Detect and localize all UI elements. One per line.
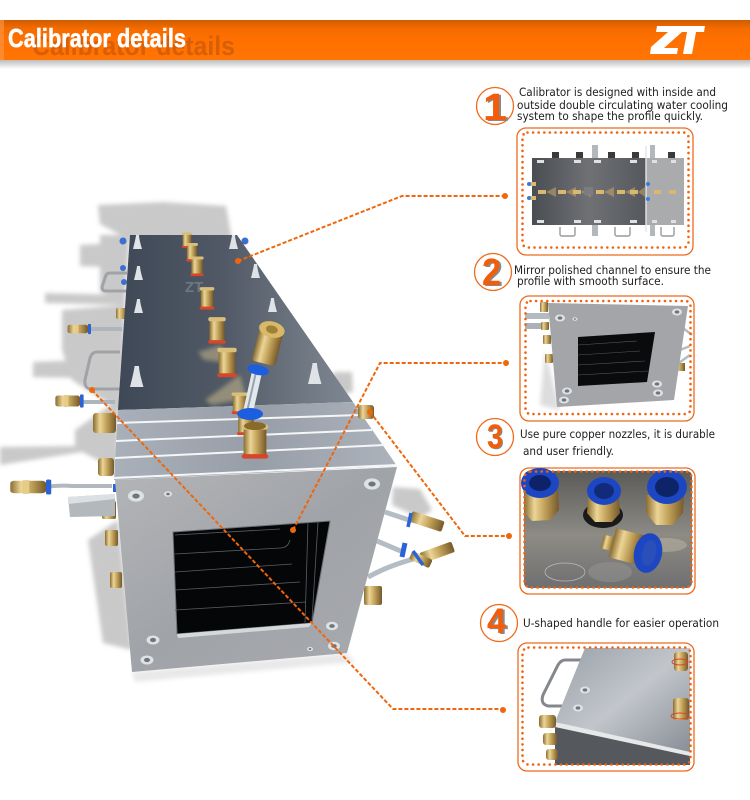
badge 4: 4 (487, 602, 507, 641)
ribbed face (114, 402, 397, 480)
U handles and left hoses (85, 273, 127, 389)
caption 1: Calibrator is designed with inside and (519, 85, 716, 99)
panel 3: copper nozzle thumbnail (520, 468, 695, 594)
badge 3: 3 (487, 418, 503, 456)
floor shadow of calibrator (0, 202, 432, 650)
side bracket (68, 494, 115, 517)
badge 1: 1 (483, 87, 507, 129)
title: Calibrator details (8, 23, 186, 53)
nozzle bodies (524, 490, 684, 565)
badge 2: 2 (484, 253, 503, 295)
caption 3: Use pure copper nozzles, it is durable (520, 427, 715, 441)
badge 3 (476, 418, 514, 457)
sight tube fitting (232, 319, 286, 459)
calibrator main photo: ZT (185, 279, 203, 296)
leader line 2 (290, 360, 509, 533)
badge 2 (474, 252, 512, 295)
calibrator main photo (10, 232, 455, 672)
header band (0, 20, 750, 69)
top face (118, 235, 353, 410)
panel 1: top view thumbnail (517, 128, 693, 255)
right hoses (368, 512, 417, 577)
badge 3: 3 (488, 419, 504, 457)
caption 2: Mirror polished channel to ensure the (514, 263, 711, 277)
top brass fittings (182, 232, 237, 377)
top face screws (130, 235, 322, 387)
logo ZT (650, 26, 705, 54)
leader line 4 (89, 387, 506, 713)
badge 1: 1 (485, 88, 509, 130)
soft shadow under front plate (132, 653, 355, 682)
caption 1: system to shape the profile quickly. (517, 109, 703, 123)
title shadow: Calibrator details (32, 31, 235, 61)
nozzle blue caps (521, 468, 687, 575)
caption 3: and user friendly. (523, 444, 614, 458)
caption 2: profile with smooth surface. (517, 274, 664, 288)
badge 4: 4 (489, 603, 509, 642)
badge 2: 2 (482, 252, 501, 294)
channel window (173, 521, 330, 638)
badge 1 (476, 87, 514, 130)
caption 4: U-shaped handle for easier operation (523, 616, 719, 630)
caption 1 (517, 85, 728, 123)
leader line 1 (235, 193, 508, 264)
caption 3 (520, 427, 715, 458)
front plate (115, 467, 397, 672)
caption 2 (514, 263, 711, 288)
badge 4 (480, 602, 518, 642)
leader line 3 (367, 409, 512, 539)
panel 2: channel thumbnail (520, 296, 694, 421)
plate screws (128, 478, 380, 665)
U-shaped handle (542, 660, 583, 706)
panel 4: U-handle thumbnail (518, 643, 694, 771)
left brass fittings (93, 413, 122, 588)
caption 1: outside double circulating water cooling (517, 98, 728, 112)
